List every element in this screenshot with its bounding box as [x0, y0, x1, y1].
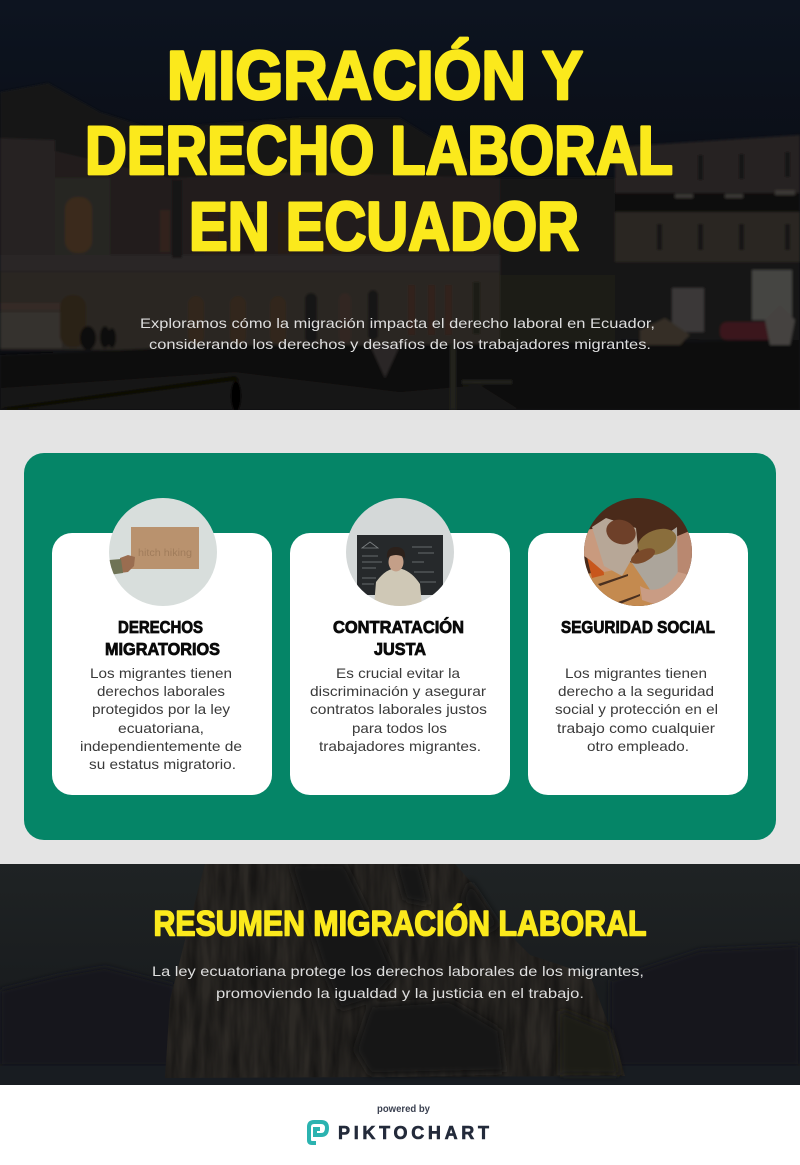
- body text: derecho a la seguridad: [558, 683, 714, 699]
- summary text: promoviendo la igualdad y la justicia en el trabajo.: [216, 985, 584, 1001]
- card: seguridad social: [528, 498, 748, 795]
- body text: [310, 665, 487, 754]
- footer: powered by Piktochart: [309, 1103, 489, 1143]
- summary photo: rock in the sea: [0, 864, 800, 1085]
- intro text: considerando los derechos y desafíos de los trabajadores migrantes.: [149, 336, 651, 352]
- summary heading: RESUMEN MIGRACIÓN LABORAL: [154, 904, 646, 944]
- summary text: La ley ecuatoriana protege los derechos laborales de los migrantes,: [152, 963, 644, 979]
- card background: [52, 533, 272, 795]
- heading: CONTRATACIÓN: [333, 616, 464, 637]
- body text: [80, 665, 242, 772]
- body text: contratos laborales justos: [310, 701, 487, 717]
- body text: para todos los: [352, 720, 447, 736]
- intro text: Exploramos cómo la migración impacta el derecho laboral en Ecuador,: [140, 315, 655, 331]
- title: [85, 37, 673, 265]
- card: contratación justa: [290, 498, 510, 795]
- body text: Es crucial evitar la: [336, 665, 460, 681]
- summary text: [152, 963, 644, 1001]
- panel: green container: [24, 453, 776, 840]
- body text: social y protección en el: [555, 701, 718, 717]
- powered by label: powered by: [377, 1103, 430, 1115]
- body text: discriminación y asegurar: [310, 683, 486, 699]
- body text: su estatus migratorio.: [89, 756, 236, 772]
- body text: ecuatoriana,: [118, 720, 204, 736]
- heading: JUSTA: [374, 639, 426, 659]
- title: MIGRACIÓN Y: [167, 37, 583, 114]
- body text: Los migrantes tienen: [565, 665, 707, 681]
- photo: hands holding burritos: [584, 498, 692, 606]
- heading: DERECHOS: [118, 617, 203, 637]
- body text: derechos laborales: [97, 683, 225, 699]
- card background: [528, 533, 748, 795]
- heading: MIGRATORIOS: [105, 639, 220, 659]
- title: EN ECUADOR: [189, 188, 579, 265]
- body text: Los migrantes tienen: [90, 665, 232, 681]
- panel: summary: [0, 864, 800, 1085]
- body text: independientemente de: [80, 738, 242, 754]
- card: derechos migratorios: [52, 498, 272, 795]
- body text: trabajo como cualquier: [557, 720, 715, 736]
- body text: [555, 665, 718, 754]
- hero photo: plaza at night: [0, 0, 800, 411]
- body text: otro empleado.: [587, 738, 689, 754]
- heading: [333, 616, 464, 659]
- panel: hero header: [0, 0, 800, 411]
- panel: gray section background: [0, 410, 800, 864]
- logo wordmark: PIKTOCHART: [338, 1123, 489, 1143]
- photo: hand holding cardboard sign: [109, 498, 217, 606]
- body text: protegidos por la ley: [92, 701, 230, 717]
- icon: Piktochart logo: [309, 1122, 327, 1143]
- heading: SEGURIDAD SOCIAL: [561, 617, 715, 637]
- title: DERECHO LABORAL: [85, 112, 673, 189]
- card background: [290, 533, 510, 795]
- photo: man in front of blackboard: [346, 498, 454, 606]
- photo: hand holding cardboard sign: hitch hiking: [138, 548, 192, 559]
- body text: trabajadores migrantes.: [319, 738, 481, 754]
- intro text: [140, 315, 655, 352]
- heading: [105, 617, 220, 659]
